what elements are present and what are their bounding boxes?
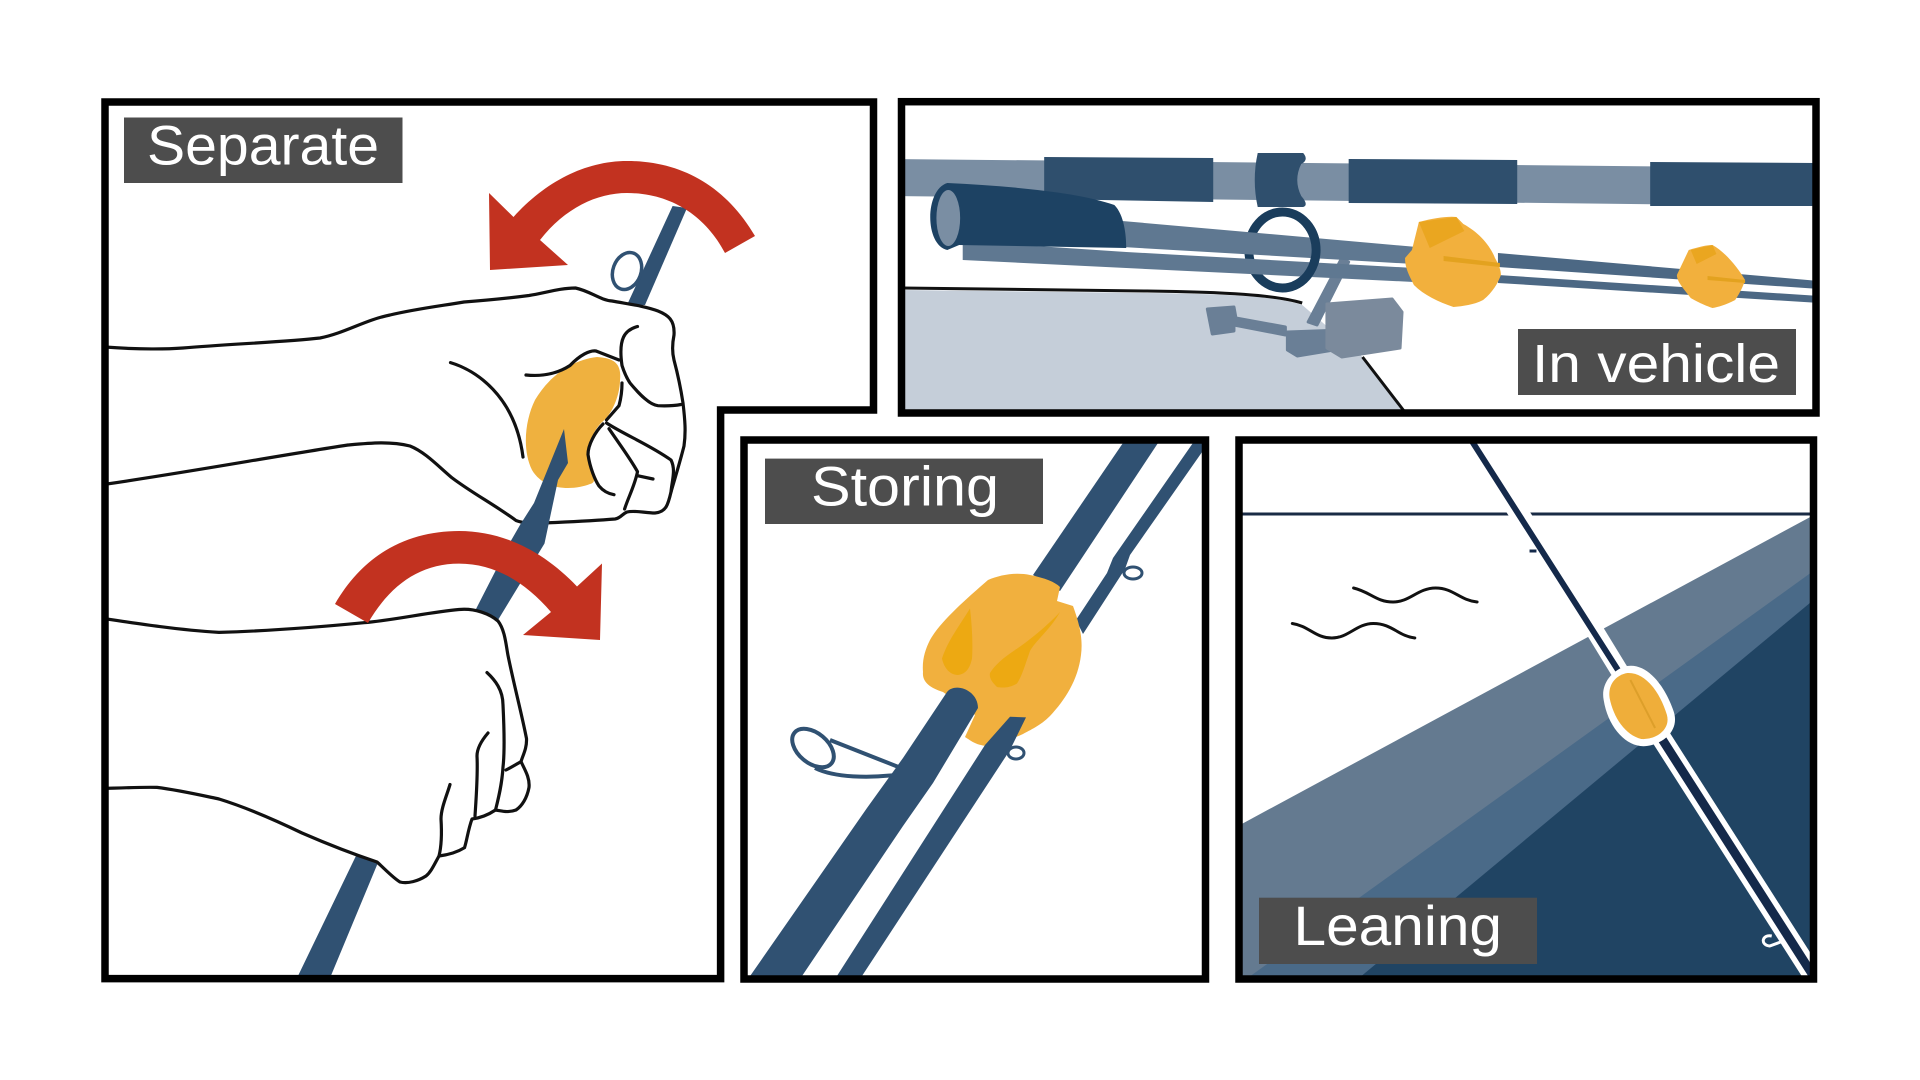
icon: orange disc small	[1677, 245, 1745, 308]
icon: rack clamp	[1255, 153, 1306, 207]
icon: orange disc	[923, 574, 1082, 746]
icon: thin rod lower	[835, 717, 1026, 979]
icon: small guide lower	[1008, 747, 1024, 759]
panel frame: storing	[744, 440, 1206, 979]
label: Storing: Storing	[811, 454, 999, 518]
illustration: roof rack rod	[895, 157, 1819, 206]
panel: separate	[100, 102, 874, 979]
panel: leaning	[1225, 440, 1823, 985]
illustration: rods	[963, 221, 1819, 303]
illustration: boat hull mid	[1238, 564, 1823, 985]
illustration: car roof	[901, 288, 1404, 413]
panel frame: in vehicle	[902, 102, 1816, 413]
icon: thin rod upper	[1076, 440, 1207, 634]
icon: orange separator disc in hand	[526, 357, 620, 488]
icon: fishing rod	[1471, 440, 1819, 985]
panel frame: leaning	[1239, 440, 1814, 979]
arrow: counter-clockwise top	[489, 161, 755, 270]
label: Leaning	[1259, 894, 1537, 964]
label: Storing	[765, 454, 1043, 524]
icon: reel	[1207, 258, 1402, 357]
panel: in vehicle	[895, 102, 1819, 413]
icon: hanging ring	[1249, 212, 1316, 288]
icon: rod tip over hand	[476, 429, 568, 620]
icon: hanging ring front	[1294, 223, 1316, 286]
illustration: lower hand	[100, 609, 529, 883]
arrow: clockwise bottom	[335, 531, 602, 640]
panel frame: separate	[105, 102, 874, 979]
illustration: boat hull light	[1225, 510, 1823, 985]
panel: storing	[744, 440, 1207, 979]
icon: rod upper section	[627, 206, 687, 305]
label: In vehicle: In vehicle	[1532, 334, 1780, 394]
illustration: lower hand details	[439, 673, 521, 856]
icon: large guide	[790, 726, 898, 779]
icon: rod guide ring	[610, 250, 644, 292]
icon: rod handle	[930, 183, 1126, 250]
icon: rod lower section	[298, 856, 378, 975]
icon: orange disc with halo	[1603, 666, 1675, 746]
label: Separate: Separate	[147, 114, 379, 176]
label: Leaning: Leaning	[1294, 894, 1502, 957]
illustration: horizon line	[1225, 512, 1823, 516]
icon: thick rod lower	[748, 688, 978, 979]
illustration: water waves	[1292, 588, 1477, 638]
icon: thick rod upper	[1033, 440, 1160, 591]
illustration: boat hull dark	[1362, 603, 1810, 976]
illustration: upper hand	[100, 288, 685, 523]
icon: small guide upper	[1124, 567, 1142, 579]
icon: orange disc large	[1405, 217, 1501, 307]
illustration: upper hand details	[450, 326, 681, 509]
